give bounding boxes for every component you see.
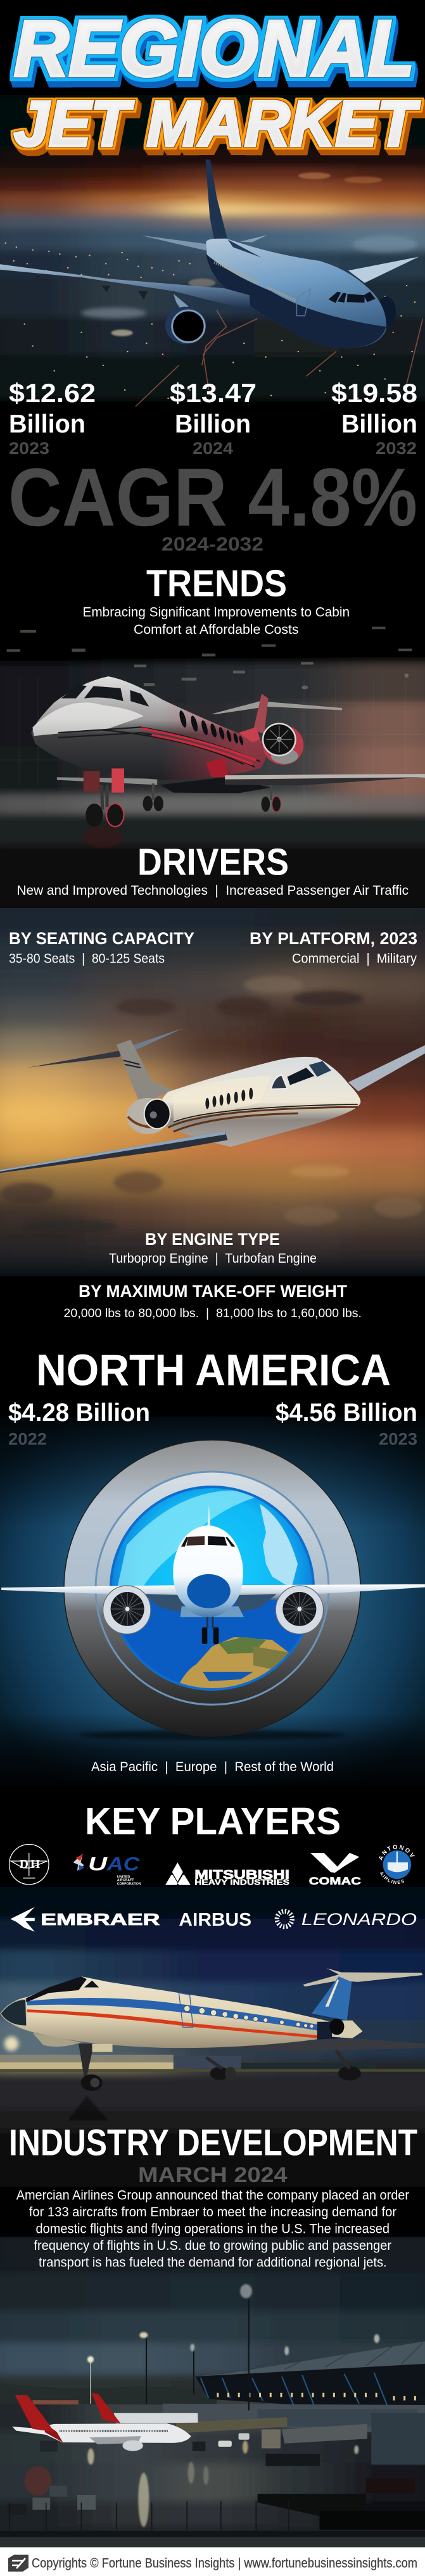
back plane [92,2393,198,2423]
logo: Airbus: AIRBUS [179,1910,251,1930]
logo: De Havilland: D [20,1857,29,1871]
north america 2023 value: $4.56 Billion [276,1399,417,1427]
logo: UAC: UNITED [117,1875,130,1879]
market value 2023: 2023 [9,439,49,458]
market value 2032: Billion [341,409,417,438]
by seating capacity: 35-80 Seats | 80-125 Seats [9,951,165,966]
plane 2 business jet [31,676,425,848]
industry development body text: frequency of flights in U.S. due to growing public and passenger [34,2238,391,2253]
logo: De Havilland: H [30,1857,41,1871]
ground vehicles and fence [0,2454,425,2548]
footer [0,2548,425,2576]
panel: regional blue background with globe plane [0,1417,425,1786]
logo: UAC: AIRCRAFT [117,1879,134,1883]
logo: UAC: AC [106,1853,140,1874]
north america 2022 value: 2022 [8,1430,47,1449]
logo: Leonardo [277,1910,417,1929]
plane 4 front view [1,1505,425,1644]
logos row [9,1844,417,1931]
by engine type: BY ENGINE TYPE [145,1230,280,1249]
by platform: Commercial | Military [292,951,417,966]
north america heading: NORTH AMERICA [36,1345,391,1394]
drivers heading and text [16,841,409,898]
logo: Mitsubishi Heavy Industries [165,1862,289,1887]
front plane [12,2395,250,2452]
by maximum take-off weight: BY MAXIMUM TAKE-OFF WEIGHT [79,1282,347,1301]
industry development body text: for 133 aircrafts from Embraer to meet the increasing demand for [29,2205,396,2219]
distant airport buildings [0,2036,425,2072]
panel: key players background and plane [0,1885,425,2153]
industry development heading: MARCH 2024 [138,2163,288,2187]
logo: UAC [73,1853,141,1886]
logo: Embraer [10,1907,160,1931]
north america 2023 value: 2023 [379,1430,417,1449]
industry development body text: Amercian Airlines Group announced that the company placed an order [16,2188,409,2203]
panel: hero sky and plane [0,95,425,407]
logo: Antonov Airlines: ANTONOV [379,1845,415,1860]
market value 2024: 2024 [193,439,233,458]
industry development heading [9,2123,417,2187]
key players heading: KEY PLAYERS [85,1800,341,1843]
plane 5 tri-jet [1,1968,425,2121]
panel: sunset segments [0,908,425,1276]
terminal building [163,2341,425,2465]
by platform: BY PLATFORM, 2023 [250,929,417,948]
market value 2032: $19.58 [331,378,417,408]
hill line [0,2383,217,2405]
north america 2022 value [8,1399,150,1449]
trends heading and text: Embracing Significant Improvements to Cabin [82,605,350,619]
industry development body text: transport is has fueled the demand for additional regional jets. [39,2256,387,2270]
title: Regional: REGIONAL [14,5,414,92]
title: Jet Market: JET MARKET [14,89,420,160]
north america 2023 value [276,1399,417,1449]
icon: Fortune Business Insights logo [8,2554,29,2572]
industry development body text: domestic flights and flying operations in the U.S. The increased [35,2222,390,2237]
by seating capacity: BY SEATING CAPACITY [9,929,194,948]
other regions: Asia Pacific | Europe | Rest of the World [91,1760,334,1774]
north america 2022 value: $4.28 Billion [8,1399,150,1427]
logo: UAC: U [88,1853,108,1874]
by platform [250,929,417,966]
industry development body text [16,2188,409,2270]
drivers heading and text: New and Improved Technologies | Increased Passenger Air Traffic [16,883,409,898]
trends heading and text: Comfort at Affordable Costs [134,622,299,637]
by engine type: Turboprop Engine | Turbofan Engine [109,1251,317,1266]
market value 2024: Billion [175,409,251,438]
market value 2023 [9,378,96,458]
ring emblem [64,1440,360,1740]
CAGR figure: 2024-2032 [162,533,263,555]
by maximum take-off weight [63,1282,362,1320]
logo: COMAC: COMAC [309,1876,361,1887]
wet reflections [25,2440,358,2527]
market value 2032: 2032 [376,439,417,458]
market value 2024 [170,378,257,458]
market value 2023: $12.62 [9,378,96,408]
market value 2024: $13.47 [170,378,257,408]
logo: Leonardo: LEONARDO [301,1910,417,1929]
plane 1 airliner [0,160,419,348]
trends heading and text [82,562,350,637]
logo: De Havilland [10,1845,49,1885]
market value 2023: Billion [9,409,86,438]
cloud puffs [0,976,423,1234]
panel: airport at night [0,2166,425,2547]
by maximum take-off weight: 20,000 lbs to 80,000 lbs. | 81,000 lbs to 1,60,000 lbs. [63,1306,362,1320]
logo: Mitsubishi Heavy Industries: MITSUBISHI [194,1868,289,1882]
logo: Antonov Airlines [379,1845,415,1884]
light poles [87,2284,379,2411]
drivers heading and text: DRIVERS [137,841,289,883]
logo: Antonov Airlines: AIRLINES [380,1872,404,1884]
trends heading and text: TRENDS [146,562,287,604]
hangar ceiling lights [7,627,412,690]
by engine type [109,1230,317,1266]
by seating capacity [9,929,194,966]
logo: Mitsubishi Heavy Industries: HEAVY INDUSTRIES [194,1879,289,1887]
market value 2032 [331,378,417,458]
plane 3 private jet [0,1028,425,1173]
logo: UAC: CORPORATION [117,1882,141,1886]
panel: trends hangar [0,627,425,908]
logo: Embraer: EMBRAER [41,1911,160,1929]
logo: COMAC [309,1853,361,1887]
